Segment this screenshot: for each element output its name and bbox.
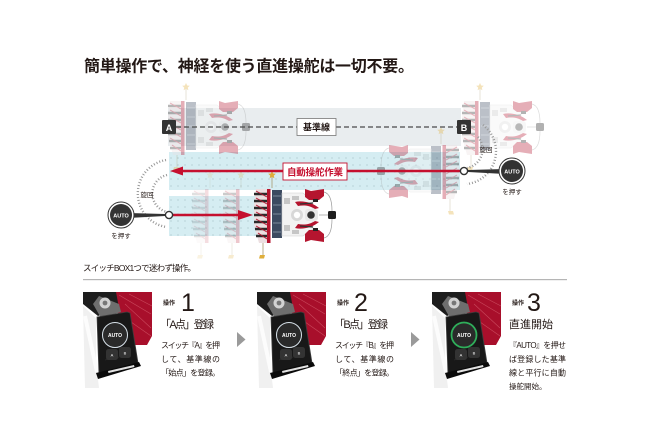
arrow: step 2 to 3: [411, 332, 420, 347]
step text: 操舵開始。: [509, 381, 546, 391]
step text: 「始点」を登録。: [161, 368, 220, 378]
step text: スイッチ『B』を押: [335, 340, 394, 350]
photo: switch box with lit ring: AUTO: [457, 333, 471, 339]
photo: switch box: B: [124, 350, 127, 356]
arrow: automatic steering: [170, 166, 460, 176]
step number: 2: [354, 289, 368, 317]
label: press right: を押す: [502, 187, 522, 196]
harvester header: ghost trail 2: [223, 171, 245, 258]
panel: step 2: [257, 289, 394, 390]
photo: switch box: AUTO: [108, 333, 122, 339]
point A marker: A: [166, 123, 173, 133]
AUTO button: left: AUTO: [113, 214, 129, 220]
caption: スイッチBOX1つで迷わず操作。: [83, 263, 196, 273]
harvester: main: [254, 171, 336, 258]
point A marker: [162, 120, 176, 134]
label: turn right: 旋回: [480, 145, 492, 154]
photo: switch box: AUTO: [282, 333, 296, 339]
step text: ば登録した基準: [509, 354, 566, 364]
point B marker: [457, 120, 471, 134]
panel: step 3: [432, 289, 566, 391]
step number: 1: [181, 289, 195, 317]
point B marker: B: [461, 123, 468, 133]
photo: switch box with lit ring: A: [460, 352, 463, 358]
photo: switch box: [83, 292, 153, 390]
step number: [512, 289, 541, 317]
photo: switch box: [257, 292, 327, 390]
automatic steering label: 自動操舵作業: [287, 166, 343, 178]
baseline label: [297, 118, 336, 136]
AUTO button: left: [108, 202, 173, 228]
AUTO button: right: AUTO: [504, 170, 520, 176]
step text: [509, 340, 566, 391]
step number: 操作: [163, 299, 175, 307]
AUTO button: right: [460, 158, 525, 184]
label: turn left: 旋回: [140, 190, 154, 199]
automatic steering band: [169, 152, 460, 190]
step text: [161, 340, 220, 378]
step heading: 「B点」登録: [334, 317, 388, 331]
step text: 『AUTO』を押せ: [509, 340, 566, 350]
step number: 操作: [337, 299, 349, 307]
step number: [163, 289, 195, 317]
step text: 線と平行に自動: [509, 368, 566, 378]
step number: 3: [527, 289, 541, 317]
step text: して、基準線の: [161, 354, 220, 364]
diagram: guidance line and work passes: [108, 83, 544, 258]
turn path: right: [467, 125, 496, 184]
turn path: left: [138, 160, 167, 227]
harvester: faded at point A: [168, 83, 250, 170]
baseline label: 基準線: [303, 122, 330, 132]
photo: switch box: A: [111, 352, 114, 358]
automatic steering label: [283, 163, 347, 180]
photo: switch box with lit ring: [432, 292, 502, 390]
step heading: 「A点」登録: [160, 317, 214, 331]
title: 簡単操作で、神経を使う直進操舵は一切不要。: [84, 56, 414, 76]
label: press left: を押す: [111, 231, 131, 240]
harvester: faded on return pass: [377, 127, 459, 214]
step text: して、基準線の: [335, 354, 394, 364]
step text: 「終点」を登録。: [335, 368, 394, 378]
step heading: 直進開始: [509, 317, 553, 331]
step text: [335, 340, 394, 378]
arrow: step 1 to 2: [237, 332, 246, 347]
photo: switch box with lit ring: B: [473, 350, 476, 356]
start pass band: [169, 196, 269, 236]
arrow: start pass: [173, 210, 253, 220]
photo: switch box: A: [285, 352, 288, 358]
harvester header: ghost trail 1: [192, 171, 214, 258]
baseline dashed line: [176, 126, 457, 128]
step number: 操作: [512, 299, 524, 307]
panel: step 1: [83, 289, 220, 390]
photo: switch box: B: [298, 350, 301, 356]
reference line band: [168, 108, 461, 146]
step text: スイッチ『A』を押: [161, 340, 220, 350]
harvester: faded at point B: [462, 83, 544, 170]
step number: [337, 289, 368, 317]
